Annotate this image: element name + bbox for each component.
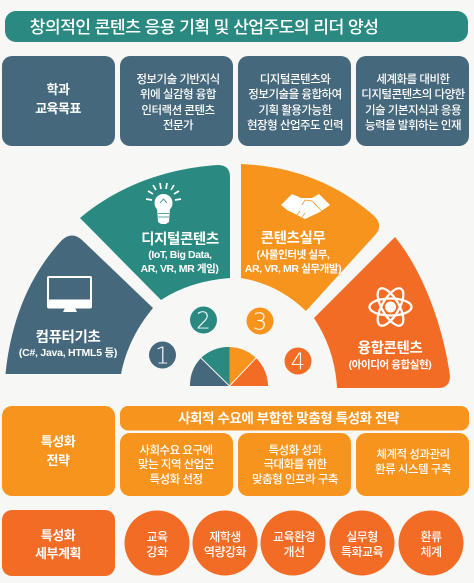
text block: goal 3: 디지털콘텐츠의 다양한 xyxy=(361,88,466,101)
circle: student capacity: 역량강화 xyxy=(204,544,247,559)
text block: goal 1: 인터랙션 콘텐츠 xyxy=(141,104,216,117)
panel: digital content sector: 디지털콘텐츠 xyxy=(141,231,219,248)
circle: education: 강화 xyxy=(146,545,168,559)
text block: goal 3: 능력을 발휘하는 인재 xyxy=(365,118,461,132)
text block: goal 1: 위에 실감형 융합 xyxy=(140,87,217,101)
heading: strategy xyxy=(2,406,115,496)
text block: strategy 1: 맞는 지역 산업군 xyxy=(138,458,215,471)
text block: goal 1: 전문가 xyxy=(163,119,194,132)
badge: number 1: 1 xyxy=(155,344,170,370)
panel: computer basics sector: (C#, Java, HTML5 등) xyxy=(19,347,117,359)
heading: department goals xyxy=(2,56,115,146)
panel: convergence content sector: 융합콘텐츠 xyxy=(358,340,422,357)
text block: goal 2 xyxy=(238,56,351,146)
panel: content practice sector: AR, VR, MR 실무개발) xyxy=(245,262,341,275)
panel: specialization strategy xyxy=(2,406,469,496)
title bar xyxy=(5,11,468,42)
badge: number 4: 4 xyxy=(291,350,305,376)
heading: strategy: 전략 xyxy=(47,453,70,468)
badge: number 2 xyxy=(190,306,217,334)
panel: content practice sector xyxy=(241,164,379,311)
text block: goal 3 xyxy=(356,56,469,146)
panel: content practice sector: (사물인터넷 실무, xyxy=(257,248,330,261)
panel: detailed plans xyxy=(2,510,464,576)
badge: number 1 xyxy=(149,342,176,370)
text block: strategy 3: 환류 시스템 구축 xyxy=(375,463,452,476)
panel: educational goals xyxy=(2,56,469,146)
heading: department goals: 학과 xyxy=(47,82,70,97)
circle: student capacity xyxy=(192,510,258,576)
text block: goal 2: 디지털콘텐츠와 xyxy=(260,73,331,86)
circle: education xyxy=(124,510,190,576)
badge: number 3: 3 xyxy=(253,310,267,336)
text block: goal 2: 정보기술을 융합하여 xyxy=(248,87,342,101)
icon: atom xyxy=(370,285,412,329)
panel: computer basics sector xyxy=(6,236,153,374)
badge: number 4 xyxy=(284,348,312,376)
icon: light bulb xyxy=(146,183,181,224)
panel: computer basics sector: 컴퓨터기초 xyxy=(36,329,100,346)
text block: strategy 1: 특성화 선정 xyxy=(149,473,203,486)
text block: strategy 1: 사회수요 요구에 xyxy=(139,444,213,457)
heading: department goals: 교육목표 xyxy=(35,101,81,116)
circle: practical education: 특화교육 xyxy=(341,545,384,559)
heading: detailed plans xyxy=(2,510,115,576)
banner: strategy headline: 사회적 수요에 부합한 맞춤형 특성화 전략 xyxy=(178,411,400,426)
icon: monitor xyxy=(47,276,92,312)
banner: strategy headline xyxy=(120,406,469,430)
heading: strategy: 특성화 xyxy=(41,434,76,449)
circle: education: 교육 xyxy=(146,530,168,544)
text block: goal 1 xyxy=(120,56,233,146)
text block: goal 1: 정보기술 기반지식 xyxy=(136,73,220,86)
panel: digital content sector: AR, VR, MR 게임) xyxy=(141,262,218,275)
text block: strategy 2 xyxy=(238,433,351,496)
chart: central pie xyxy=(190,347,268,386)
text block: goal 3: 세계화를 대비한 xyxy=(376,72,451,86)
circle: environment: 교육환경 xyxy=(273,530,315,544)
text block: strategy 1 xyxy=(120,433,233,496)
circle: feedback system xyxy=(398,510,464,576)
title bar: 창의적인 콘텐츠 응용 기획 및 산업주도의 리더 양성 xyxy=(30,17,378,37)
badge: number 2: 2 xyxy=(196,308,211,334)
panel: content practice sector: 콘텐츠실무 xyxy=(261,230,325,247)
badge: number 3 xyxy=(246,308,274,336)
panel: convergence content sector: (아이디어 융합실현) xyxy=(349,358,431,371)
text block: goal 2: 현장형 산업주도 인력 xyxy=(247,118,343,132)
circle: environment: 개선 xyxy=(283,545,305,559)
text block: goal 3: 기술 기본지식과 응용 xyxy=(365,104,462,117)
circle: practical education: 실무형 xyxy=(346,529,378,544)
panel: convergence content sector xyxy=(314,237,450,388)
panel: digital content sector xyxy=(80,165,230,300)
text block: strategy 2: 특성화 성과 xyxy=(268,444,322,457)
heading: detailed plans: 세부계획 xyxy=(35,546,81,561)
text block: goal 2: 기획 활용가능한 xyxy=(258,103,333,117)
text block: strategy 3 xyxy=(356,433,469,496)
panel: digital content sector: (IoT, Big Data, xyxy=(148,249,212,261)
circle: feedback system: 체계 xyxy=(420,545,442,559)
text block: strategy 2: 극대화를 위한 xyxy=(263,457,328,471)
circle: student capacity: 재학생 xyxy=(209,529,241,544)
icon: handshake xyxy=(281,194,330,219)
circle: environment xyxy=(260,510,326,576)
circle: feedback system: 환류 xyxy=(420,530,442,544)
circle: practical education xyxy=(330,510,394,576)
heading: detailed plans: 특성화 xyxy=(41,528,76,543)
text block: strategy 2: 맞춤형 인프라 구축 xyxy=(252,472,339,486)
text block: strategy 3: 체계적 성과관리 xyxy=(376,447,450,461)
